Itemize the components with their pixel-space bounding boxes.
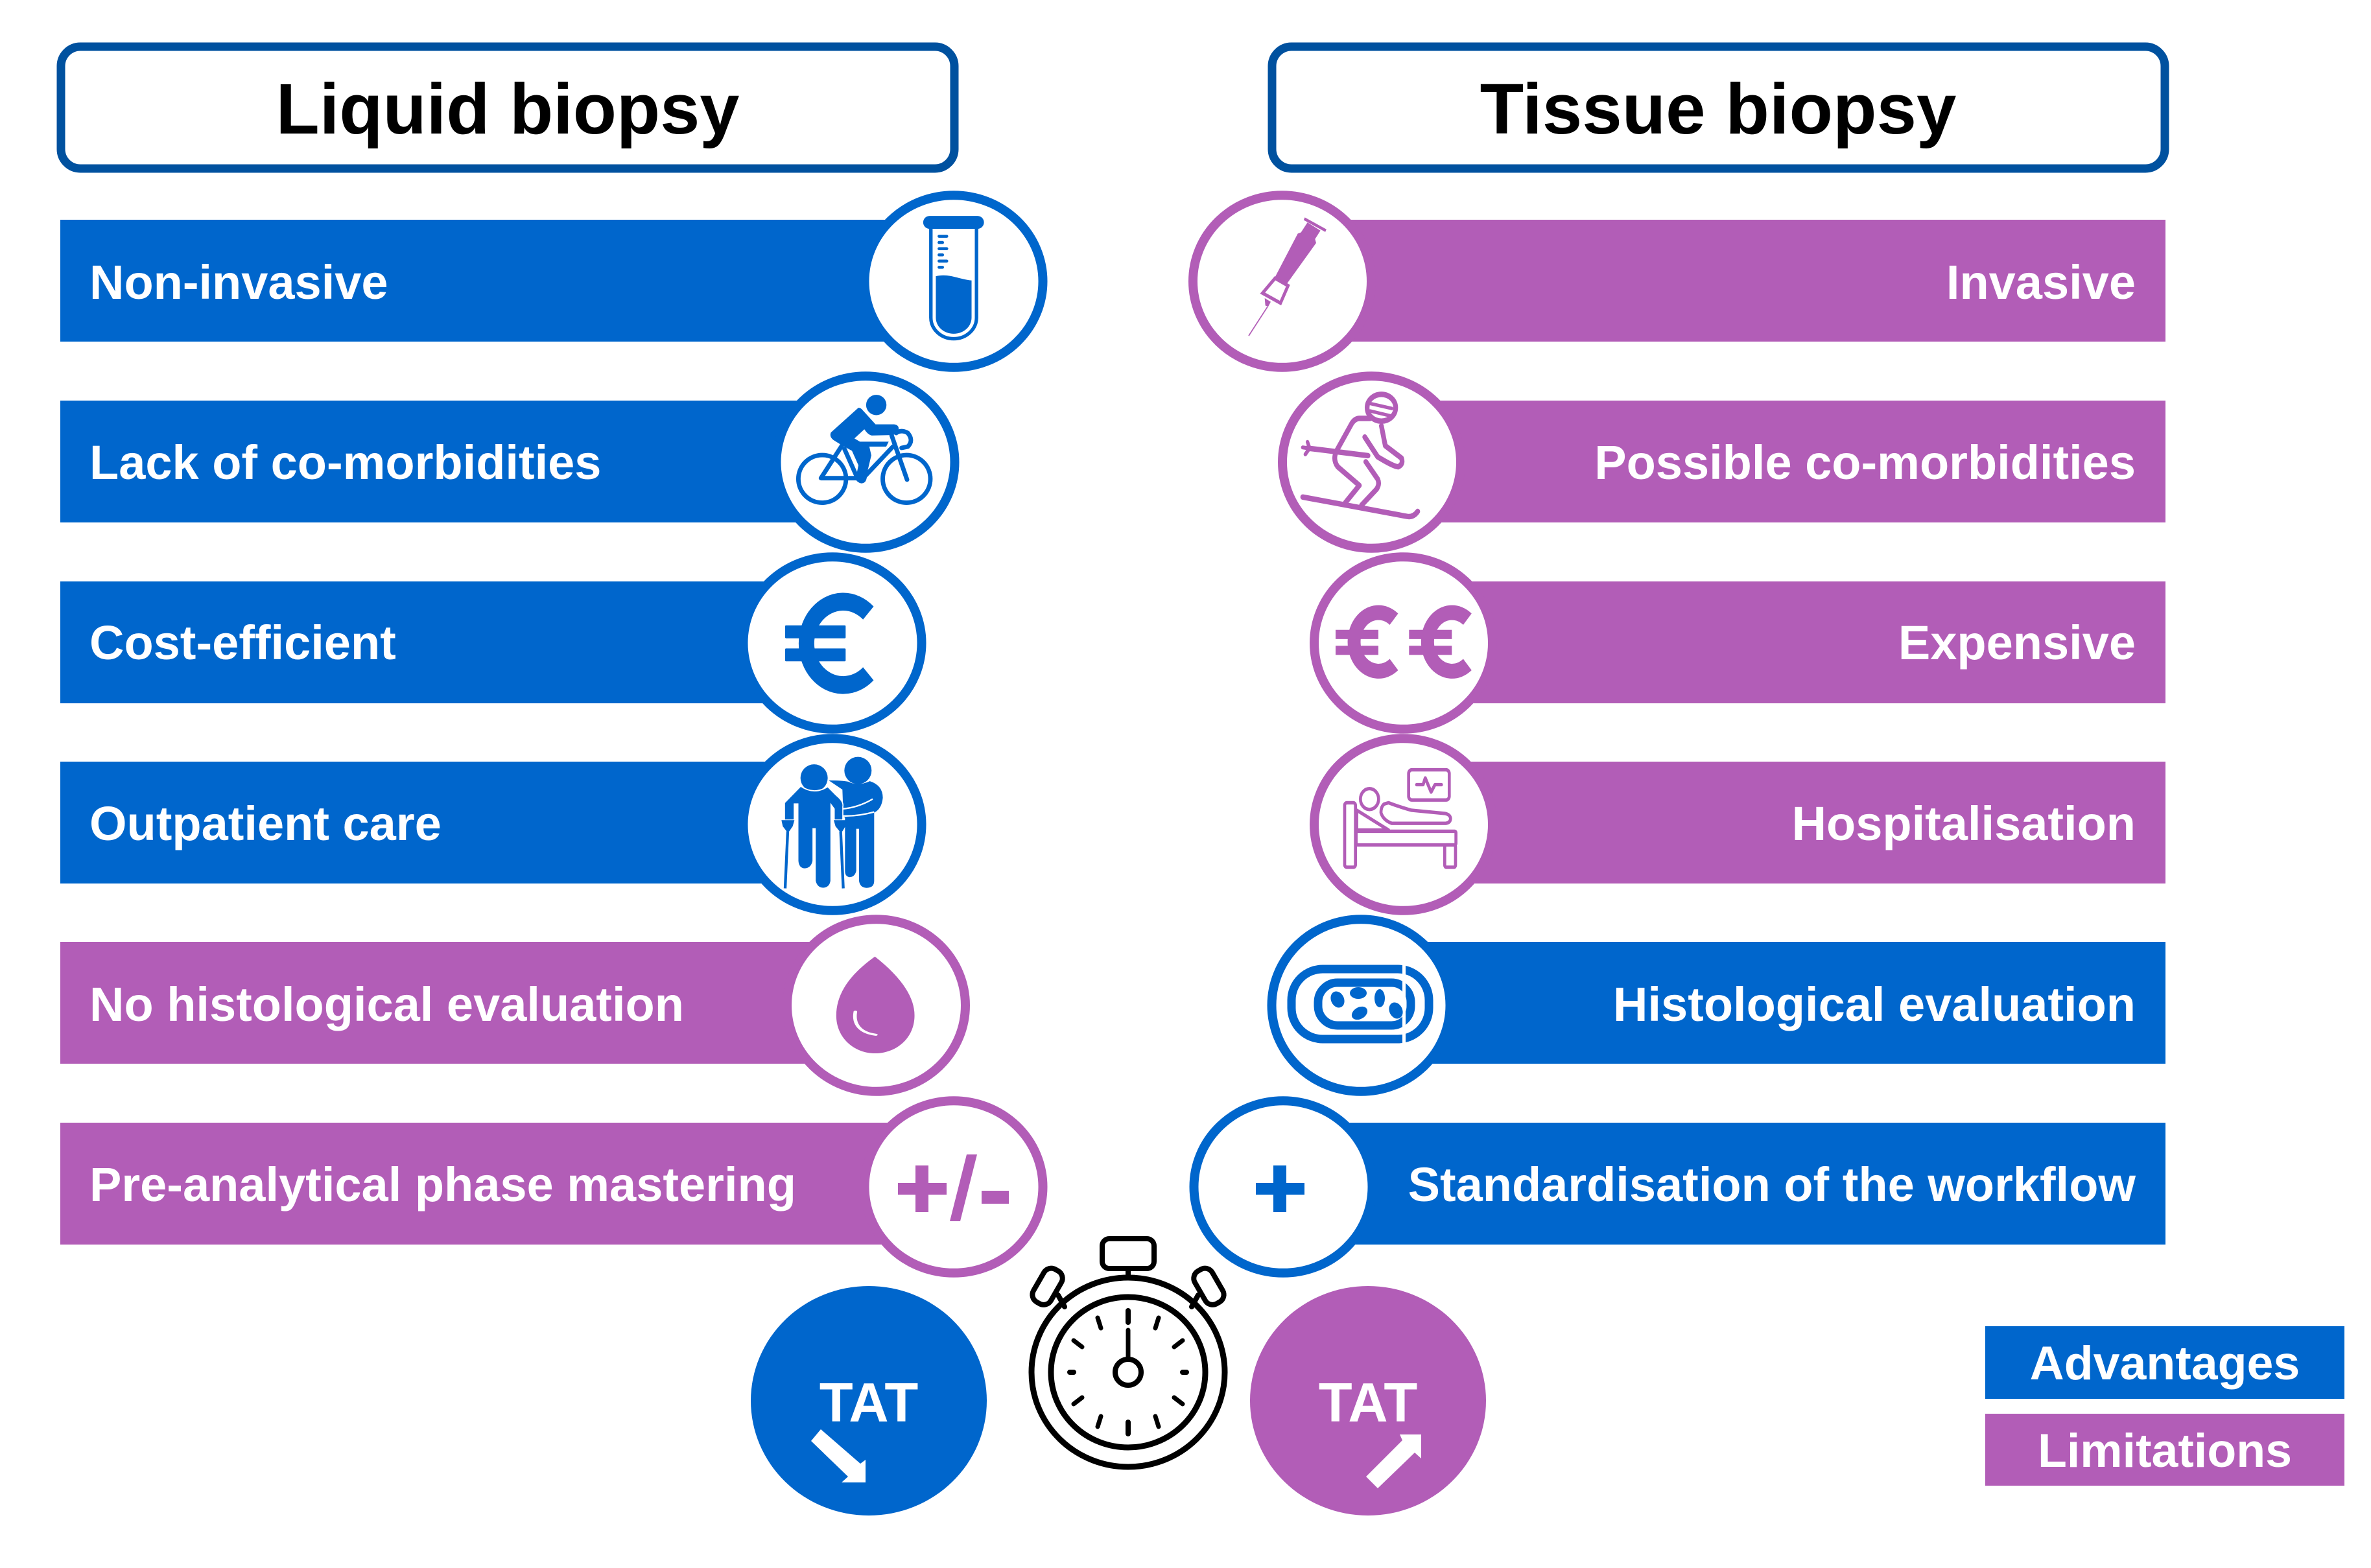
legend [1985,1326,2344,1486]
icon: skier [1303,394,1418,517]
arrow: down [811,1429,866,1482]
row: Non-invasive: Non-invasive [89,255,388,309]
row: Standardisation of the workflow: Standardisation of the workflow [1408,1158,2136,1211]
icon: hospital bed [1345,770,1456,867]
TAT decreased circle: TAT [820,1372,918,1434]
row: Histological evaluation: Histological evaluation [1613,977,2136,1031]
row: Lack of co-morbidities [60,376,954,548]
legend: Limitations [2038,1423,2292,1477]
icon: carer and patient with crutches [781,757,883,888]
icon: cyclist [798,395,930,503]
row: Pre-analytical phase mastering: Pre-analytical phase mastering [89,1158,796,1211]
row: Hospitalisation [1314,738,2165,911]
heading: Liquid biopsy [61,47,954,169]
row: Cost-efficient [60,557,922,729]
TAT increased circle: TAT [1319,1372,1417,1434]
stopwatch icon [1030,1239,1227,1467]
icon: syringe [1249,218,1326,336]
heading: Liquid biopsy: Liquid biopsy [276,69,739,149]
legend: Advantages [2030,1336,2300,1390]
icon: plus minus [898,1154,1009,1221]
icon: plus [1256,1165,1304,1212]
heading: Tissue biopsy: Tissue biopsy [1480,69,1956,149]
icon: two euros [1336,613,1467,671]
row: Non-invasive [60,195,1043,368]
row: Cost-efficient: Cost-efficient [89,616,396,670]
row: Possible co-morbidities: Possible co-morbidities [1594,436,2136,489]
row: Pre-analytical phase mastering [60,1101,1043,1273]
icon: test tube [923,216,984,339]
TAT decreased circle [751,1286,987,1515]
TAT increased circle [1250,1286,1486,1515]
row: Invasive: Invasive [1946,255,2136,309]
row: Invasive [1193,195,2165,368]
row: Lack of co-morbidities: Lack of co-morbidities [89,436,601,489]
row: Histological evaluation [1272,919,2165,1092]
row: No histological evaluation [60,919,965,1092]
row: Expensive: Expensive [1898,616,2136,670]
row: Outpatient care [60,738,922,911]
row: Standardisation of the workflow [1194,1101,2165,1273]
arrow: up [1366,1434,1421,1488]
row: Possible co-morbidities [1282,376,2165,548]
icon: blood drop [836,957,915,1053]
icon: tissue slide [1292,963,1429,1045]
row: No histological evaluation: No histological evaluation [89,977,684,1031]
icon: euro [785,602,868,685]
heading: Tissue biopsy [1272,47,2165,169]
row: Outpatient care: Outpatient care [89,797,442,850]
row: Hospitalisation: Hospitalisation [1792,797,2136,850]
row: Expensive [1314,557,2165,729]
